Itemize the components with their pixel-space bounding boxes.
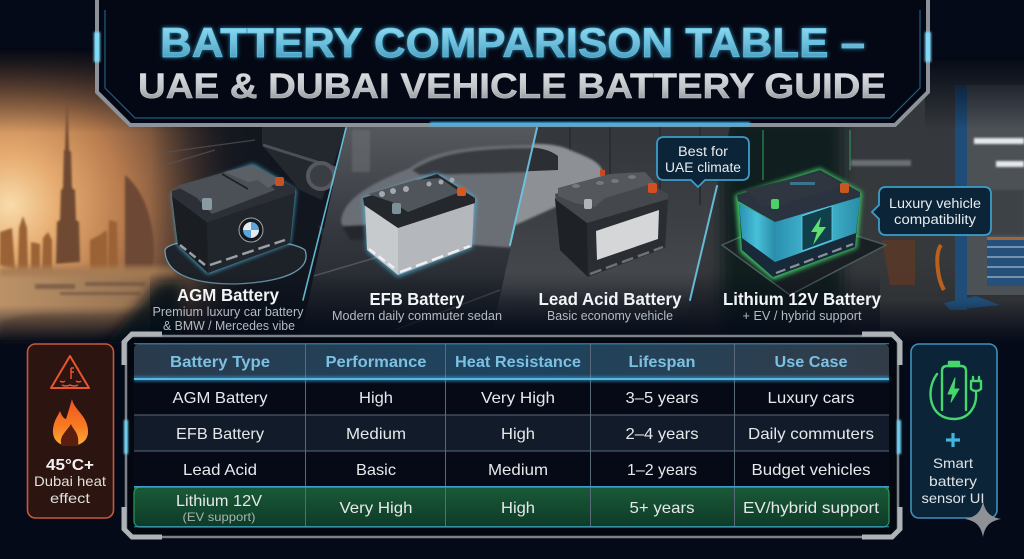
table header <box>170 354 848 371</box>
icon: battery with plug <box>930 362 981 419</box>
comparison table <box>124 334 901 537</box>
battery: lithium 12V <box>735 168 862 280</box>
row: EFB: High <box>501 426 535 443</box>
label: EFB <box>332 289 502 323</box>
table header: Performance <box>326 354 427 371</box>
callout: best for UAE climate <box>657 137 749 187</box>
red terminal <box>275 177 284 186</box>
table header: Battery Type <box>170 354 270 371</box>
row: EFB: Daily commuters <box>748 426 874 443</box>
row: EFB: 2–4 years <box>626 426 698 443</box>
scene: workshop with lift <box>680 60 1024 340</box>
panel: smart battery sensor: Smart <box>933 455 973 471</box>
row: lithium 12V: (EV support) <box>182 510 256 524</box>
panel: smart battery sensor: sensor UI <box>922 490 984 506</box>
row: lead acid: Budget vehicles <box>752 462 870 479</box>
label: AGM <box>152 285 304 333</box>
icon: flame <box>53 399 88 446</box>
table rows <box>134 344 889 527</box>
label: lithium: + EV / hybrid support <box>742 309 862 323</box>
icon: heat warning triangle <box>51 356 89 388</box>
scene: Dubai desert skyline <box>0 48 270 342</box>
row: AGM: High <box>359 390 393 407</box>
row: lead acid <box>183 462 870 479</box>
plus sign <box>946 433 960 447</box>
angled light dividers <box>303 128 717 300</box>
label: lead acid <box>538 289 682 323</box>
lightning bolt <box>811 217 826 245</box>
row: lithium 12V: EV/hybrid support <box>743 500 880 517</box>
title line 1: BATTERY COMPARISON TABLE – <box>160 19 865 66</box>
row: lithium 12V: High <box>501 500 535 517</box>
callout: luxury vehicle compatibility <box>872 187 991 235</box>
label: AGM: Premium luxury car battery <box>152 305 304 319</box>
row: lead acid: Basic <box>356 462 396 479</box>
callout: best for UAE climate: UAE climate <box>665 160 741 175</box>
row: EFB: EFB Battery <box>176 426 264 443</box>
panel: heat effect <box>28 344 114 518</box>
table header: Use Case <box>774 354 848 371</box>
bottom fade of scene <box>0 273 1024 342</box>
battery: AGM <box>172 164 296 274</box>
grid lines <box>134 344 889 527</box>
BMW roundel <box>239 218 263 242</box>
scene: EFB silver sedan backdrop <box>300 125 545 340</box>
label: AGM: AGM Battery <box>177 285 279 305</box>
panel: heat effect: 45°C+ <box>46 457 94 474</box>
row: AGM: 3–5 years <box>626 390 698 407</box>
row: lead acid: 1–2 years <box>627 462 697 479</box>
battery: lead acid <box>555 172 668 277</box>
panel: heat effect: Dubai heat <box>34 473 106 489</box>
panel: heat effect: effect <box>50 490 90 506</box>
table header: Lifespan <box>628 354 696 371</box>
row: lead acid: Lead Acid <box>183 462 257 479</box>
top fade of workshop <box>925 55 1024 130</box>
panel: smart battery sensor <box>911 344 997 518</box>
label: lithium <box>723 289 881 323</box>
label: AGM: & BMW / Mercedes vibe <box>163 319 295 333</box>
label: lead acid: Basic economy vehicle <box>547 309 673 323</box>
label: EFB: Modern daily commuter sedan <box>332 309 502 323</box>
table header: Heat Resistance <box>455 354 581 371</box>
row: AGM: Luxury cars <box>768 390 854 407</box>
row: lithium 12V: Lithium 12V <box>176 493 262 510</box>
callout: luxury vehicle compatibility: Luxury vehicle <box>889 196 981 211</box>
label: lead acid: Lead Acid Battery <box>538 289 682 309</box>
row: lithium 12V: Very High <box>340 500 412 517</box>
panel: smart battery sensor: battery <box>929 473 977 489</box>
row: lithium 12V: 5+ years <box>630 500 694 517</box>
row: AGM <box>172 390 854 407</box>
scene: lead acid garage backdrop <box>494 127 730 324</box>
Burj Khalifa <box>56 97 80 264</box>
row: lithium 12V <box>176 493 880 524</box>
row: lead acid: Medium <box>488 462 548 479</box>
label: lithium: Lithium 12V Battery <box>723 289 881 309</box>
row: AGM: AGM Battery <box>172 390 268 407</box>
callout: luxury vehicle compatibility: compatibility <box>894 212 976 227</box>
Burj Al Arab <box>125 165 154 272</box>
callout: best for UAE climate: Best for <box>678 144 729 159</box>
battery labels <box>152 285 881 333</box>
battery: EFB <box>363 173 476 277</box>
title panel <box>94 0 931 127</box>
table frame <box>124 334 901 537</box>
row: EFB: Medium <box>346 426 406 443</box>
label: EFB: EFB Battery <box>370 289 465 309</box>
title line 2: UAE & DUBAI VEHICLE BATTERY GUIDE <box>138 67 886 106</box>
sparkle star <box>965 501 1001 537</box>
row: EFB <box>176 426 874 443</box>
scene: AGM luxury car backdrop <box>156 127 346 325</box>
row: AGM: Very High <box>481 390 555 407</box>
